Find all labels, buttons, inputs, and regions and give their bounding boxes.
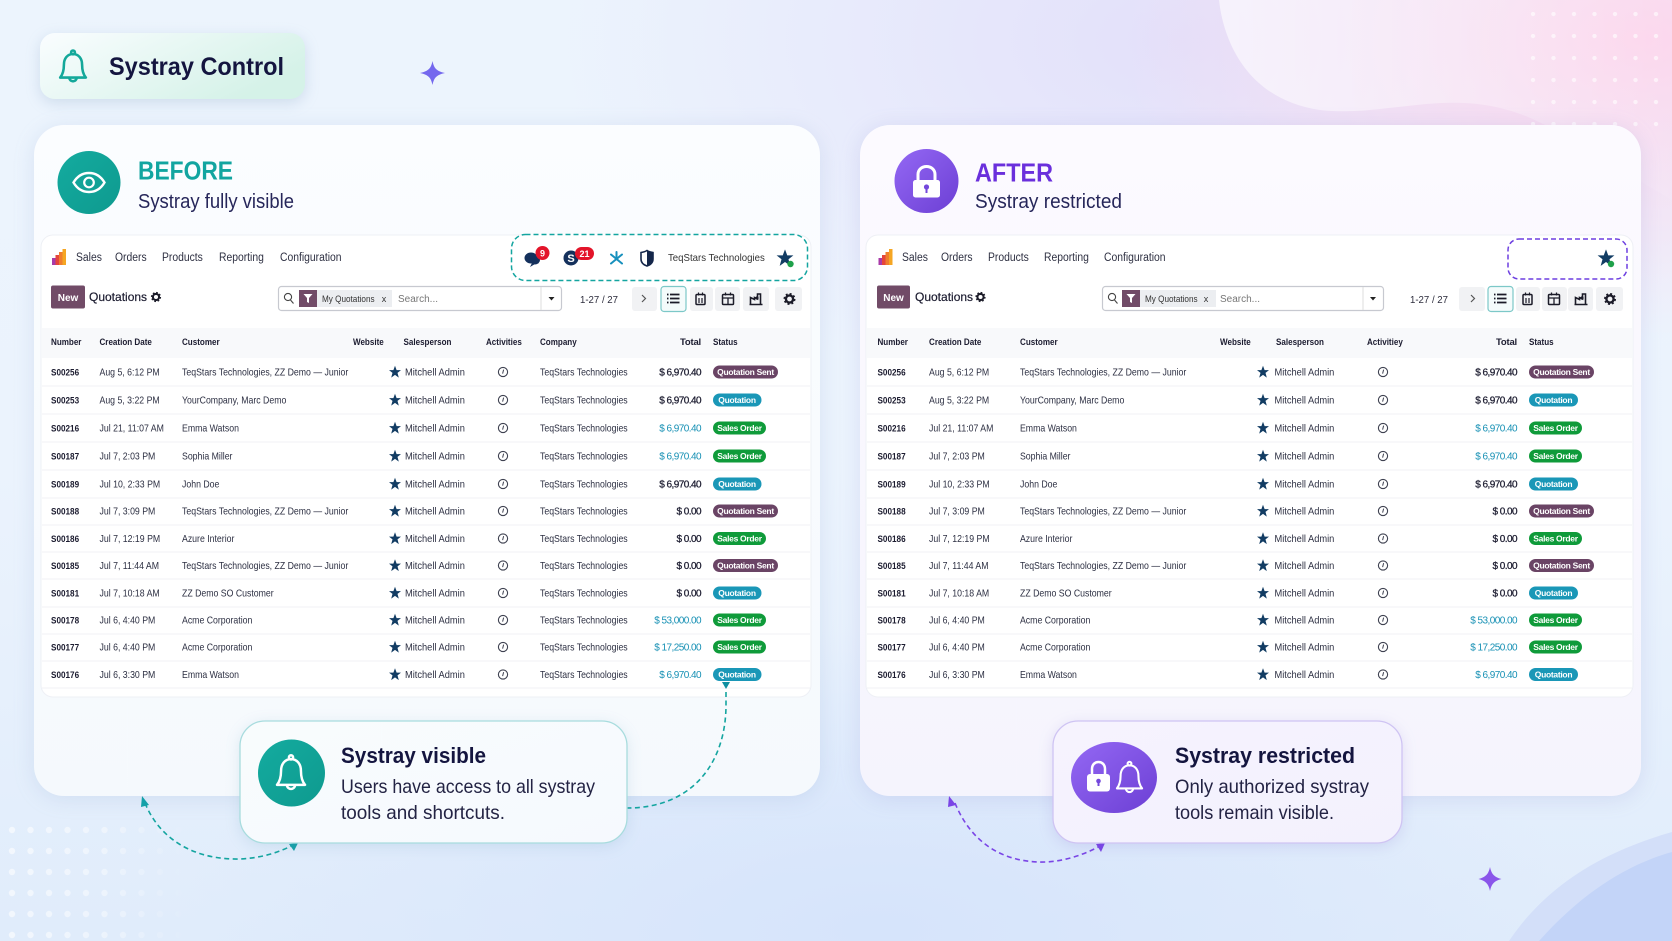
table row: Mitchell Admin (405, 423, 465, 435)
table header: Status (713, 336, 738, 347)
table row: Mitchell Admin (1274, 506, 1334, 518)
table row (51, 504, 778, 518)
table row: TeqStars Technologies (540, 505, 628, 517)
table row: Mitchell Admin (405, 506, 465, 518)
table row: Sales Order (1533, 615, 1579, 625)
table row: S00177 (51, 642, 79, 653)
table row (878, 422, 1582, 435)
table row: Sales Order (717, 451, 763, 461)
callout text: tools remain visible. (1175, 802, 1334, 824)
table row: $ 6,970.40 (659, 452, 702, 462)
search box: My Quotations (1145, 293, 1198, 304)
table row: $ 0.00 (676, 561, 702, 572)
table row: ZZ Demo SO Customer (1020, 587, 1112, 599)
table row: $ 53,000.00 (654, 616, 702, 626)
table row: Quotation (718, 588, 756, 598)
background wave bottom right (1509, 832, 1672, 941)
arrow: table to callout (627, 682, 730, 808)
table row: Quotation Sent (717, 506, 774, 516)
callout text (341, 776, 595, 824)
navigation menu: Sales (76, 252, 102, 264)
table row: Mitchell Admin (1274, 395, 1334, 407)
table row: Sales Order (717, 423, 763, 433)
table row: Sales Order (1533, 534, 1579, 544)
table row: Quotation (1535, 479, 1572, 489)
heading: after: AFTER (975, 158, 1053, 188)
callout: before (240, 721, 627, 843)
icon: chat with badge (524, 246, 550, 267)
table row: ZZ Demo SO Customer (182, 587, 274, 599)
table row: Aug 5, 6:12 PM (99, 366, 160, 378)
background blob top right (1219, 0, 1672, 200)
table row: Quotation Sent (1533, 560, 1590, 570)
table row: Jul 7, 12:19 PM (99, 532, 160, 544)
table row: John Doe (1020, 478, 1057, 490)
table row: Quotation (718, 395, 756, 405)
table row: Jul 7, 3:09 PM (929, 505, 985, 517)
table row: Mitchell Admin (405, 534, 465, 545)
table row: TeqStars Technologies, ZZ Demo — Junior (1020, 366, 1186, 378)
table row: S00256 (51, 367, 79, 378)
table row: S00189 (51, 479, 79, 490)
navigation menu (902, 252, 1166, 264)
navigation menu: Orders (941, 252, 973, 264)
table row (51, 559, 778, 572)
table row: Sales Order (1533, 423, 1579, 433)
view buttons (632, 286, 802, 312)
table row (878, 586, 1578, 600)
table row: TeqStars Technologies (540, 422, 628, 434)
table row: TeqStars Technologies (540, 394, 628, 406)
table row: Sophia Miller (1020, 450, 1070, 462)
quotations title: Quotations (89, 290, 147, 304)
icon: activity with badge: S (567, 253, 575, 265)
table row: Sales Order (717, 615, 763, 625)
table header: Salesperson (404, 336, 451, 347)
table row: TeqStars Technologies (540, 450, 628, 462)
table row: S00216 (877, 423, 906, 434)
navigation menu: Reporting (219, 252, 264, 264)
table row: Quotation Sent (717, 560, 774, 570)
navigation menu: Configuration (1104, 252, 1166, 264)
table row: Aug 5, 3:22 PM (929, 394, 989, 406)
table header: Creation Date (99, 336, 152, 347)
search box (1102, 286, 1384, 310)
table row: $ 6,970.40 (1475, 396, 1518, 406)
table row: Azure Interior (182, 532, 234, 544)
table row (51, 586, 761, 600)
table row: Acme Corporation (182, 614, 252, 626)
table row: S00178 (51, 615, 79, 626)
table row (878, 532, 1582, 545)
table row: Jul 7, 3:09 PM (99, 505, 155, 517)
table row: Aug 5, 6:12 PM (929, 366, 989, 378)
table row: TeqStars Technologies (540, 559, 628, 571)
table row: $ 6,970.40 (659, 670, 702, 681)
table header: Customer (1020, 336, 1058, 347)
table row: S00216 (51, 423, 79, 434)
table header: Salesperson (1276, 336, 1324, 347)
search box: Search... (1220, 294, 1260, 305)
icon: sparkle bottom (1478, 867, 1502, 891)
icon: company star (777, 249, 794, 267)
table row (51, 366, 778, 379)
table row: $ 0.00 (1492, 534, 1518, 545)
table row: S00187 (51, 451, 79, 462)
table row: Mitchell Admin (1274, 534, 1334, 545)
table row: S00186 (51, 533, 79, 544)
table row: Mitchell Admin (405, 395, 465, 407)
table row: Jul 21, 11:07 AM (929, 422, 994, 434)
table row: S00253 (51, 395, 79, 406)
table row (51, 450, 766, 463)
table row: Emma Watson (182, 668, 239, 680)
table row: Jul 7, 10:18 AM (929, 587, 989, 599)
systray restricted highlight (1508, 239, 1627, 279)
table row: Mitchell Admin (405, 642, 465, 654)
table row: Mitchell Admin (405, 615, 465, 627)
table row: John Doe (182, 478, 219, 490)
table row: Mitchell Admin (405, 367, 465, 379)
table header: Number (51, 336, 82, 347)
table row: S00189 (877, 479, 906, 490)
table row: S00185 (51, 560, 79, 571)
subtitle: before: Systray fully visible (138, 191, 294, 213)
table row: Jul 7, 2:03 PM (99, 450, 155, 462)
table row: S00177 (877, 642, 906, 653)
table row: $ 0.00 (1492, 561, 1518, 572)
table row: Mitchell Admin (405, 479, 465, 491)
navigation menu (76, 252, 342, 264)
table row: Jul 6, 3:30 PM (929, 668, 985, 680)
navigation menu: Products (162, 252, 203, 264)
table header: Website (1220, 336, 1251, 347)
table row: S00185 (877, 560, 906, 571)
icon: chat with badge: 9 (540, 248, 545, 258)
table row: Jul 10, 2:33 PM (929, 478, 990, 490)
icon: activity with badge (564, 247, 594, 266)
table header: Status (1529, 336, 1554, 347)
table row: Mitchell Admin (1274, 561, 1334, 572)
table row: TeqStars Technologies, ZZ Demo — Junior (1020, 559, 1186, 571)
table row: Azure Interior (1020, 532, 1072, 544)
table row: Acme Corporation (1020, 641, 1090, 653)
button: new: New (58, 293, 79, 304)
table row (51, 614, 766, 627)
panel: before (34, 125, 820, 796)
table row: $ 0.00 (1492, 588, 1518, 600)
callout heading: Systray visible (341, 743, 486, 768)
pager: 1-27 / 27 (580, 294, 618, 306)
table row: $ 53,000.00 (1470, 616, 1518, 626)
callout text: Users have access to all systray (341, 776, 595, 798)
table row: Sales Order (717, 534, 763, 544)
table row: S00181 (51, 588, 79, 599)
icon: shield (641, 250, 653, 266)
table row: Jul 6, 4:40 PM (929, 641, 985, 653)
table row: Quotation (718, 670, 756, 680)
table row: TeqStars Technologies (540, 587, 628, 599)
icon: teal star (611, 252, 622, 264)
callout text (1175, 776, 1369, 824)
subtitle: after: Systray restricted (975, 191, 1122, 213)
table row: S00186 (877, 533, 906, 544)
table row (878, 640, 1582, 654)
table row: Quotation (1535, 588, 1572, 598)
table row: TeqStars Technologies (540, 478, 628, 490)
table row: Quotation Sent (717, 367, 774, 377)
table row: Aug 5, 3:22 PM (99, 394, 160, 406)
table row: Quotation (1535, 670, 1572, 680)
table row: $ 17,250.00 (1470, 642, 1518, 654)
table row: S00188 (877, 506, 906, 517)
icon: lock and bell (1071, 742, 1157, 813)
table row: $ 6,970.40 (659, 480, 702, 490)
table row: Mitchell Admin (1274, 615, 1334, 627)
table row: Jul 10, 2:33 PM (99, 478, 160, 490)
table row: Mitchell Admin (1274, 588, 1334, 600)
app card: after (866, 235, 1633, 697)
search box: My Quotations (322, 293, 375, 304)
table row: Mitchell Admin (1274, 423, 1334, 435)
table row: $ 6,970.40 (1475, 480, 1518, 490)
table row: Mitchell Admin (1274, 367, 1334, 379)
table row: TeqStars Technologies, ZZ Demo — Junior (182, 366, 348, 378)
table row (878, 504, 1594, 518)
table row: $ 17,250.00 (654, 642, 702, 654)
table header: Customer (182, 336, 220, 347)
view buttons (1459, 286, 1623, 312)
table row: Mitchell Admin (405, 451, 465, 463)
table row: Sales Order (717, 642, 763, 652)
table row (878, 450, 1582, 463)
table row: S00176 (51, 669, 79, 680)
table row: TeqStars Technologies, ZZ Demo — Junior (182, 559, 348, 571)
table header (42, 328, 810, 358)
table row: S00256 (877, 367, 906, 378)
table row: Jul 21, 11:07 AM (99, 422, 164, 434)
button: new (51, 286, 85, 308)
table row: S00188 (51, 506, 79, 517)
heading: before: BEFORE (138, 156, 233, 186)
table row: TeqStars Technologies (540, 532, 628, 544)
dots top right (1530, 8, 1672, 133)
table row (878, 394, 1578, 407)
table row: Jul 7, 12:19 PM (929, 532, 990, 544)
table row: Mitchell Admin (1274, 451, 1334, 463)
table row: Quotation Sent (1533, 506, 1590, 516)
icon: activity with badge: 21 (579, 249, 590, 259)
callout text: Only authorized systray (1175, 776, 1369, 798)
panel: after (860, 125, 1641, 796)
table row (51, 532, 766, 545)
table row (51, 668, 761, 681)
table row: Sophia Miller (182, 450, 232, 462)
table row (51, 422, 766, 435)
table header: Total (680, 337, 701, 348)
table row: S00187 (877, 451, 906, 462)
table row: Quotation (1535, 395, 1572, 405)
table row: $ 6,970.40 (659, 368, 702, 378)
search box: x (1204, 294, 1209, 304)
icon: app logo (52, 249, 66, 265)
table row: Mitchell Admin (405, 670, 465, 681)
table header: Activities (486, 336, 522, 347)
arrow: curved loop after (948, 796, 1105, 862)
table row: Jul 7, 11:44 AM (99, 559, 159, 571)
search box (278, 286, 562, 310)
table row: $ 0.00 (1492, 506, 1518, 518)
table row (878, 478, 1578, 491)
title text: Systray Control (109, 53, 284, 81)
icon: lock (894, 149, 958, 213)
pager: 1-27 / 27 (1410, 294, 1448, 306)
company name: TeqStars Technologies (668, 253, 765, 264)
table row (878, 668, 1578, 681)
table row: TeqStars Technologies (540, 641, 628, 653)
table row: TeqStars Technologies (540, 366, 628, 378)
table row: Jul 7, 10:18 AM (99, 587, 160, 599)
systray highlighted (512, 234, 808, 280)
callout: after (1053, 721, 1402, 843)
table row: $ 6,970.40 (1475, 670, 1518, 681)
icon: bell (60, 50, 86, 81)
table row (51, 640, 766, 654)
table row: $ 6,970.40 (659, 396, 702, 406)
table row: Jul 6, 3:30 PM (99, 668, 155, 680)
navigation menu: Orders (115, 252, 147, 264)
table row: Jul 7, 2:03 PM (929, 450, 985, 462)
table row: Sales Order (1533, 642, 1579, 652)
icon: eye (58, 151, 120, 214)
table header: Activitiey (1367, 336, 1403, 347)
search box: x (382, 294, 387, 304)
table row: Acme Corporation (182, 641, 252, 653)
navigation menu: Configuration (280, 252, 342, 264)
table header: Company (540, 336, 577, 347)
table header: Website (353, 336, 384, 347)
table row: $ 6,970.40 (1475, 452, 1518, 462)
table row: $ 0.00 (676, 506, 702, 518)
icon: bell circle (258, 740, 325, 806)
table row: S00176 (877, 669, 906, 680)
icon: company star (1598, 249, 1614, 267)
table header (867, 328, 1632, 358)
navigation menu: Reporting (1044, 252, 1089, 264)
table row (51, 394, 761, 407)
table header: Number (878, 336, 908, 347)
table row: $ 6,970.40 (1475, 424, 1518, 434)
search box: Search... (398, 294, 438, 305)
table row: TeqStars Technologies (540, 668, 628, 680)
table row: $ 6,970.40 (659, 424, 702, 434)
table row (878, 614, 1582, 627)
table header: Total (1496, 337, 1517, 348)
table row: Emma Watson (182, 422, 239, 434)
table row: TeqStars Technologies (540, 614, 628, 626)
table row: Emma Watson (1020, 422, 1077, 434)
app card: before (41, 234, 811, 697)
button: new: New (883, 293, 904, 304)
callout text: tools and shortcuts. (341, 802, 505, 824)
arrow: curved loop before (141, 796, 298, 859)
table row: Mitchell Admin (1274, 479, 1334, 491)
table row (878, 366, 1594, 379)
table row (878, 559, 1594, 572)
table row: Sales Order (1533, 451, 1579, 461)
navigation menu: Sales (902, 252, 928, 264)
table row: Quotation Sent (1533, 367, 1590, 377)
table row: Mitchell Admin (1274, 642, 1334, 654)
table row: Jul 6, 4:40 PM (99, 614, 155, 626)
table row: Mitchell Admin (405, 561, 465, 572)
icon: app logo (878, 249, 892, 265)
table row: YourCompany, Marc Demo (182, 394, 286, 406)
table row: Jul 7, 11:44 AM (929, 559, 989, 571)
quotations title: Quotations (915, 290, 973, 304)
table row: $ 6,970.40 (1475, 368, 1518, 378)
table row (51, 478, 761, 491)
table header: Creation Date (929, 336, 981, 347)
table row: TeqStars Technologies, ZZ Demo — Junior (1020, 505, 1186, 517)
table row: Acme Corporation (1020, 614, 1090, 626)
table row: S00253 (877, 395, 906, 406)
table row: Jul 6, 4:40 PM (99, 641, 155, 653)
table row: $ 0.00 (676, 534, 702, 545)
table row: YourCompany, Marc Demo (1020, 394, 1124, 406)
table row: S00181 (877, 588, 906, 599)
button: new (877, 286, 910, 308)
table row: TeqStars Technologies, ZZ Demo — Junior (182, 505, 348, 517)
title badge (40, 33, 305, 99)
callout heading: Systray restricted (1175, 743, 1355, 768)
table row: S00178 (877, 615, 906, 626)
table row: $ 0.00 (676, 588, 702, 600)
icon: sparkle top (420, 61, 445, 85)
table row: Mitchell Admin (1274, 670, 1334, 681)
table row: Quotation (718, 479, 756, 489)
navigation menu: Products (988, 252, 1029, 264)
table row: Emma Watson (1020, 668, 1077, 680)
dots bottom left (9, 827, 126, 938)
table row: Mitchell Admin (405, 588, 465, 600)
table row: Jul 6, 4:40 PM (929, 614, 985, 626)
